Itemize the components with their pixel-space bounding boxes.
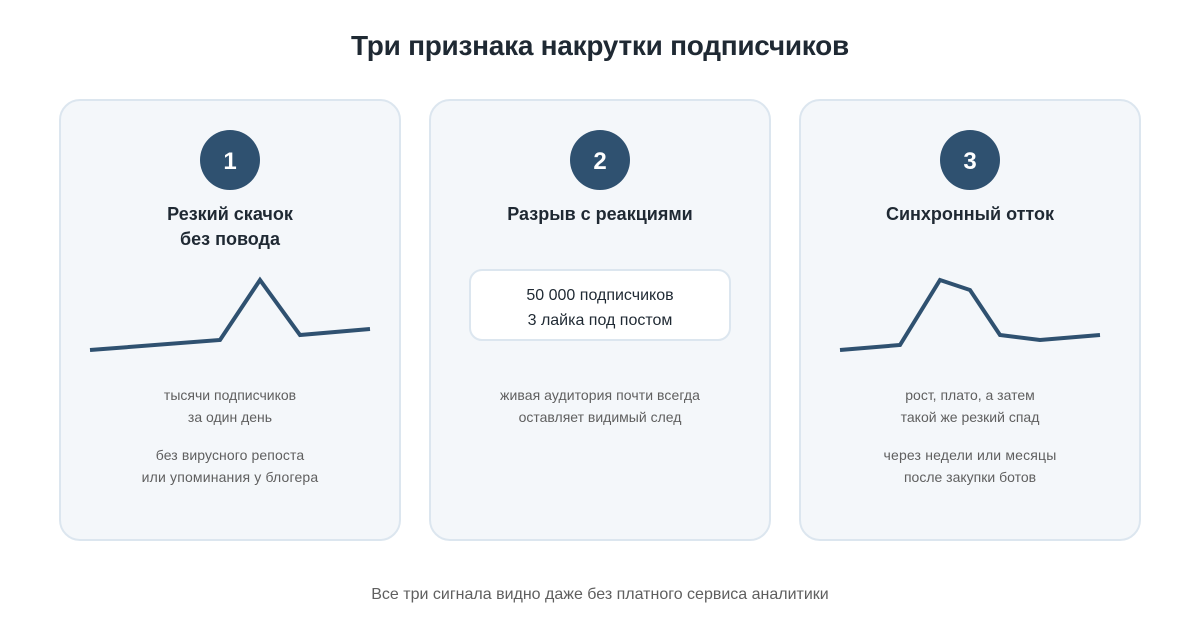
text: reaction description: живая аудитория почти всегда: [500, 387, 700, 403]
heading: synchronous churn: Синхронный отток: [886, 204, 1054, 224]
callout: subscribers vs likes: 50 000 подписчиков: [526, 287, 674, 304]
panel: sharp jump: [59, 99, 401, 541]
line chart: spike: [90, 276, 370, 352]
text: churn timing: через недели или месяцы: [884, 447, 1056, 463]
text: no viral cause: без вирусного репоста: [156, 447, 304, 463]
text: spike timing: [164, 387, 296, 425]
callout: subscribers vs likes: 3 лайка под постом: [528, 312, 672, 329]
text: spike timing: за один день: [188, 409, 272, 425]
text: no viral cause: [142, 447, 318, 485]
panel: synchronous churn: [799, 99, 1141, 541]
text: churn shape: рост, плато, а затем: [905, 387, 1035, 403]
icon: number 3: 3: [963, 148, 977, 175]
icon: number 2: [570, 130, 630, 190]
text: reaction description: оставляет видимый след: [519, 409, 681, 425]
footer note: Все три сигнала видно даже без платного сервиса аналитики: [371, 586, 829, 603]
text: spike timing: тысячи подписчиков: [164, 387, 296, 403]
panel: reaction gap: [429, 99, 771, 541]
heading: sharp jump: Резкий скачок: [167, 204, 293, 224]
text: churn timing: после закупки ботов: [904, 469, 1036, 485]
icon: number 1: 1: [223, 148, 237, 175]
heading: reaction gap: Разрыв с реакциями: [507, 204, 693, 224]
icon: number 3: [940, 130, 1000, 190]
text: churn timing: [884, 447, 1056, 485]
text: reaction description: [500, 387, 700, 425]
callout: subscribers vs likes: [469, 269, 731, 341]
text: no viral cause: или упоминания у блогера: [142, 469, 318, 485]
text: churn shape: такой же резкий спад: [901, 409, 1039, 425]
line chart: rise and drop: [840, 278, 1100, 352]
title: Три признака накрутки подписчиков: [351, 30, 849, 61]
icon: number 1: [200, 130, 260, 190]
icon: number 2: 2: [593, 148, 607, 175]
heading: sharp jump: без повода: [180, 229, 280, 249]
heading: sharp jump: [167, 204, 293, 249]
text: churn shape: [900, 387, 1040, 425]
